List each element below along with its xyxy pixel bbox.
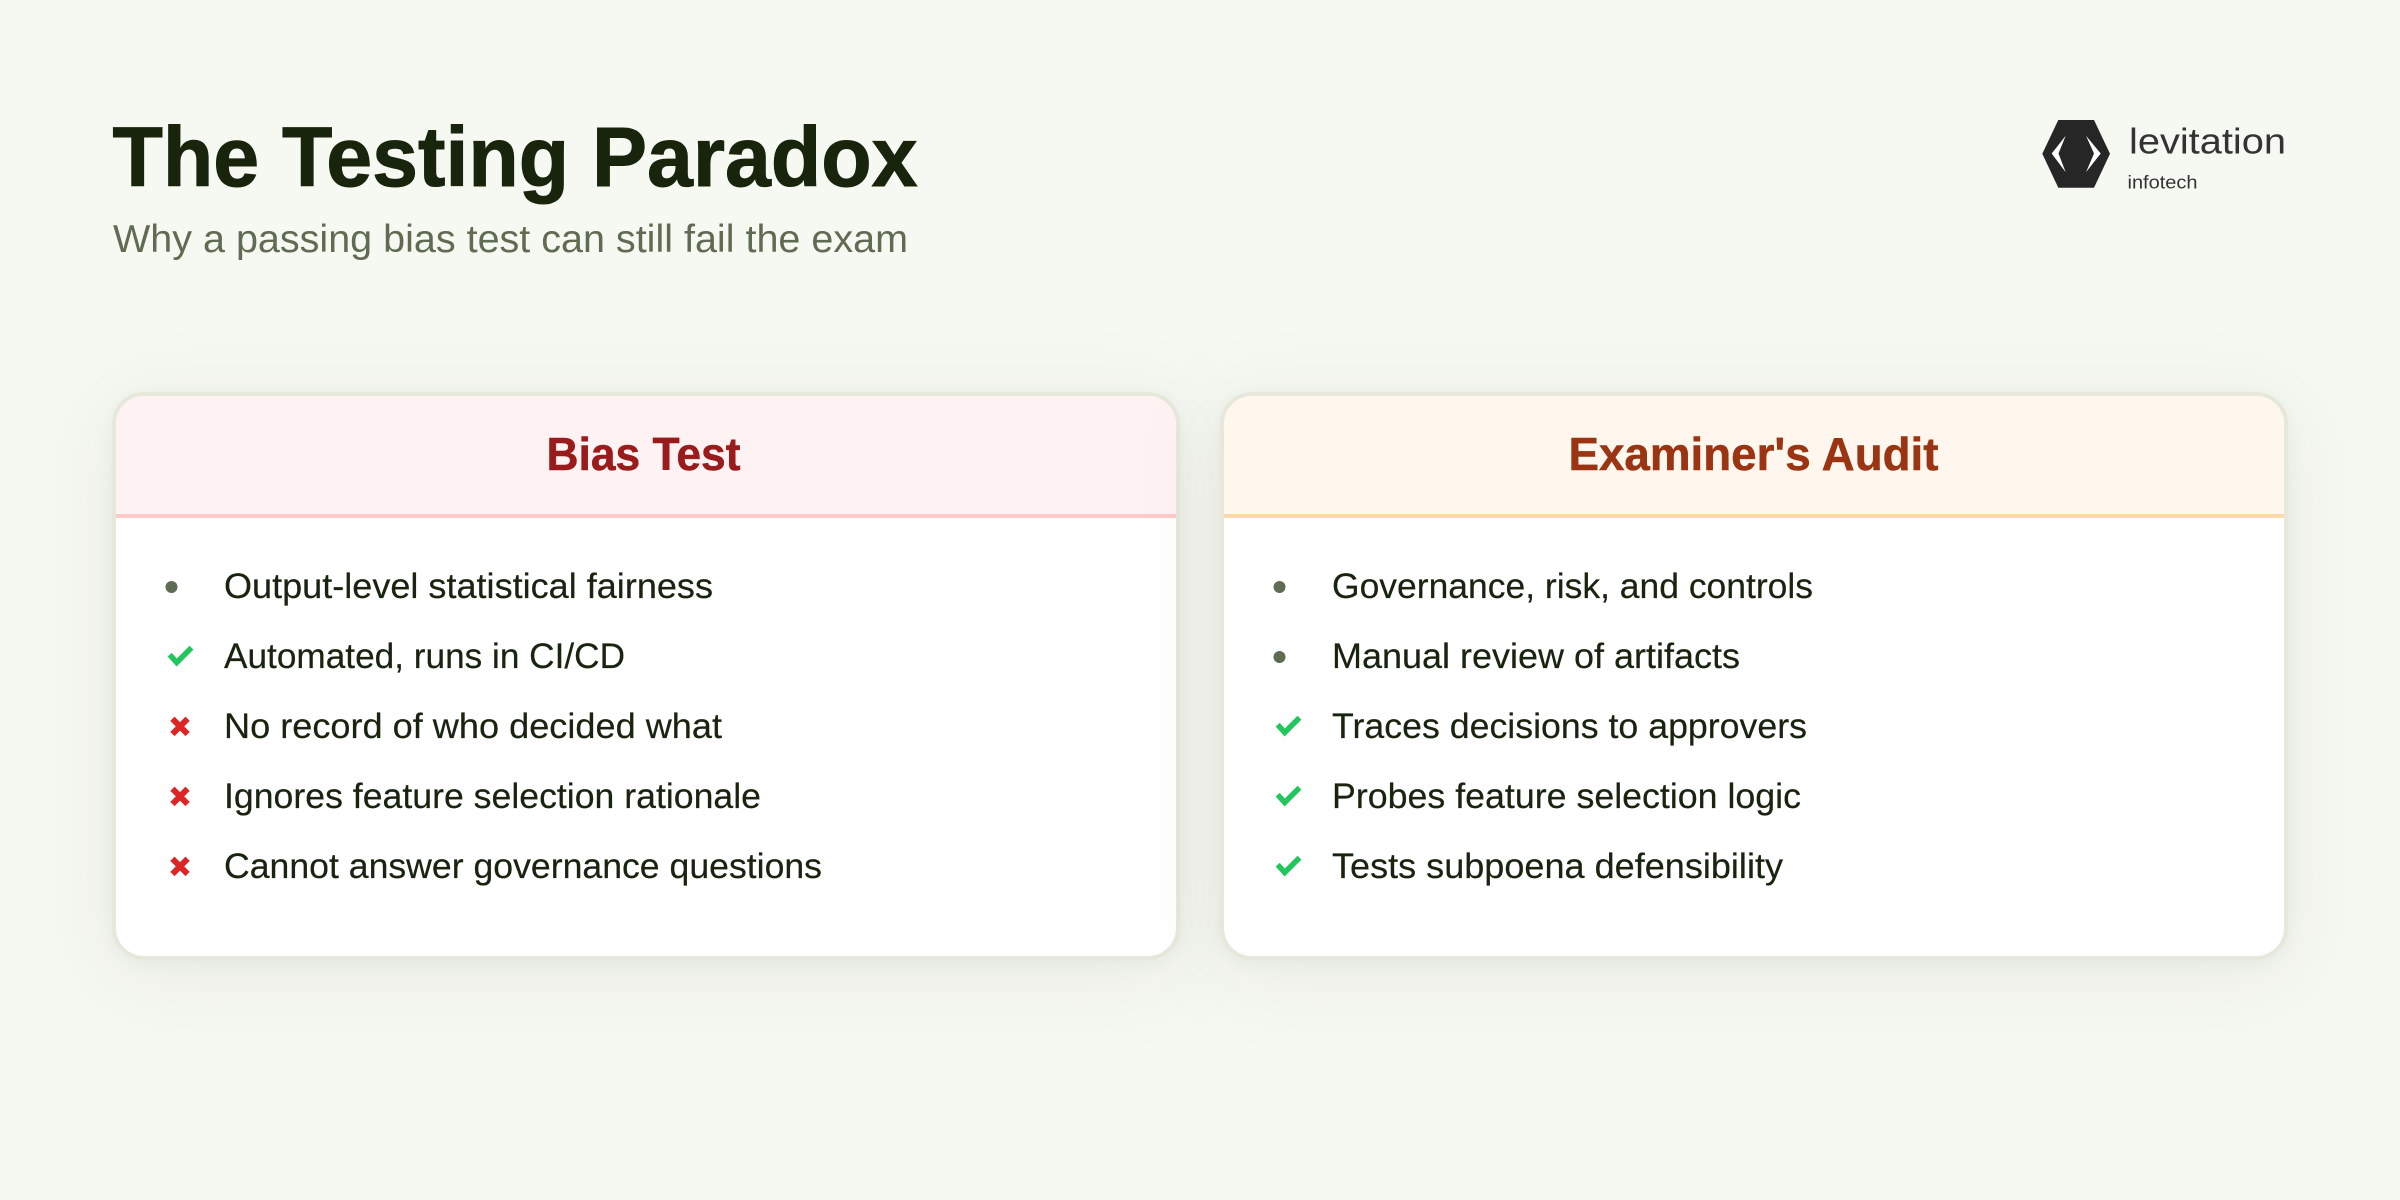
row: manual review: Manual review of artifacts [1332,636,1740,676]
panel header [1224,396,2284,518]
panel: examiner's audit [1222,394,2286,958]
row: cannot answer: Cannot answer governance questions [224,846,822,886]
row: governance: Governance, risk, and controls [1332,566,1813,606]
panel header [116,396,1176,518]
panel background [1222,394,2286,958]
heading: bias test: Bias Test [546,428,740,480]
row: probes: Probes feature selection logic [1332,776,1801,816]
row: traces: Traces decisions to approvers [1332,706,1807,746]
row: ignores: Ignores feature selection rationale [224,776,761,816]
logo tagline: infotech [2128,172,2198,192]
row: output-level: Output-level statistical fairness [224,566,713,606]
icon: logo hexagon [2042,120,2110,188]
row: no record: No record of who decided what [224,706,722,746]
title: The Testing Paradox [112,110,918,204]
row: tests subpoena: Tests subpoena defensibility [1332,846,1783,886]
logo wordmark: levitation [2129,120,2286,162]
panel: bias test [114,394,1178,958]
logo: levitation infotech [2042,120,2286,192]
row: automated: Automated, runs in CI/CD [224,636,625,676]
panel background [114,394,1178,958]
heading: examiner's audit: Examiner's Audit [1568,428,1938,480]
subtitle: Why a passing bias test can still fail the exam [113,218,908,261]
